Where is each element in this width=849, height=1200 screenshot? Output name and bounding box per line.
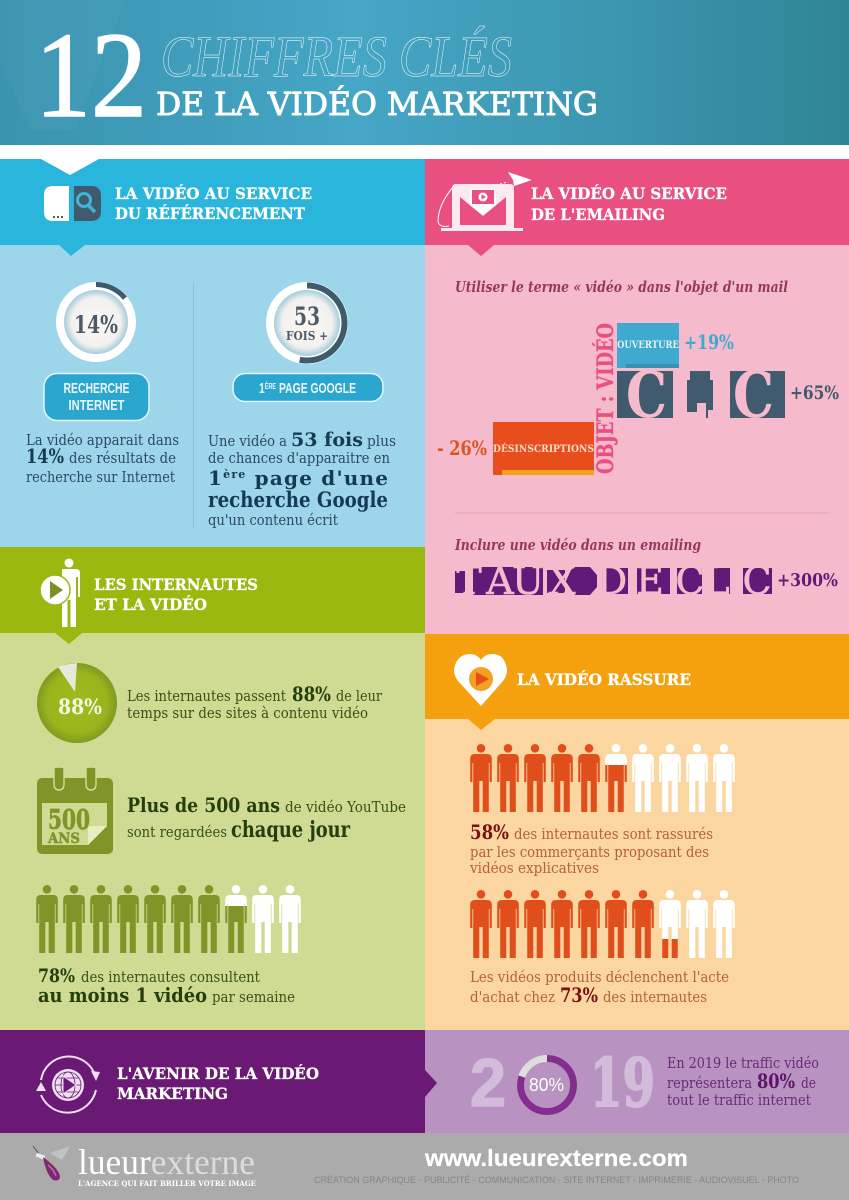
white separator band [0,145,849,159]
text: 53 fois: Une vidéo a [208,432,287,450]
logo: tagline: L'AGENCE QUI FAIT BRILLER VOTRE IMAGE [78,1179,256,1188]
text: 2019: 80% [757,1069,795,1093]
pictogram: 73% people [470,890,735,958]
text: 14% [26,431,179,486]
chart: 2019 with 80% ring [470,1044,655,1122]
stat: taux de clic: TAUXDECLIC [456,559,772,603]
heading: objet: Utiliser le terme « vidéo » dans l'objet d'un mail [455,279,788,296]
text: 500 ans: Plus de 500 ans [127,793,280,817]
chart: 53 fois ring: FOIS + [286,329,328,343]
section header: référencement: LA VIDÉO AU SERVICE [115,183,312,203]
pictogram: 58% people [470,744,735,812]
bar: désinscriptions: DÉSINSCRIPTIONS [493,443,594,455]
chart: 2019 with 80% ring: 2 [470,1045,506,1121]
text: 88% [127,682,383,722]
section header: internautes [0,547,425,644]
text: 73%: d'achat chez [470,988,555,1006]
section header: internautes: ET LA VIDÉO [94,594,207,614]
text: 78%: 78% [38,965,75,987]
panel: emailing [425,159,849,634]
text: 58%: vidéos explicatives [469,859,599,877]
logo: wordmark: lueurexterne [78,1142,255,1182]
badge: 1ère page google: 1 [259,380,267,397]
text: 73%: Les vidéos produits déclenchent l'acte [470,968,729,986]
section header: emailing: DE L'EMAILING [531,205,665,224]
text: 53 fois: plus [367,432,396,450]
text: 73%: 73% [560,983,598,1007]
icon: email laptop [438,172,532,231]
bar: clic: LI [692,378,708,402]
section header: référencement [0,159,425,256]
title: 12: 12 [35,8,147,143]
bar: ouverture: OUVERTURE [617,340,679,351]
header banner [0,0,849,145]
bar: ouverture [617,323,734,368]
text: 88%: Les internautes passent [127,687,286,705]
badge: 1ère page google: PAGE GOOGLE [276,380,356,397]
chart: 88% pie [37,663,117,743]
text: 53 fois: qu'un contenu écrit [208,511,338,529]
text: 53 fois: 1 [208,466,222,490]
badge: 1ère page google: ÈRE [265,382,277,391]
section header: référencement: DU RÉFÉRENCEMENT [115,203,305,223]
section header: rassure: LA VIDÉO RASSURE [517,669,691,689]
text: 2019: représentera [667,1074,752,1092]
icon: search [44,186,101,221]
text: 2019 [667,1054,819,1109]
chart: 2019 with 80% ring: 80% [529,1075,564,1095]
text: 53 fois: de chances d'apparaitre en [208,449,390,467]
badge: recherche internet: RECHERCHE [64,380,130,397]
text: 73%: des internautes [603,988,707,1006]
bar: ouverture: +19% [684,330,734,354]
footer [0,1133,849,1200]
text: 500 ans: de vidéo YouTube [285,798,406,816]
text: 58%: 58% [470,820,509,844]
text: 14%: des résultats de [69,449,176,467]
panel: rassure [425,634,849,1030]
section header: avenir [0,1030,437,1133]
section header: emailing [425,159,849,256]
text: 14%: La vidéo apparait dans [26,431,179,449]
icon: heart with play [454,654,507,706]
stat: taux de clic: +300% [777,570,838,591]
axis label: objet vidéo: OBJET : VIDÉO [592,323,619,474]
text: 14%: recherche sur Internet [26,468,175,486]
section header: avenir: L'AVENIR DE LA VIDÉO [117,1063,319,1083]
bar: désinscriptions [437,422,594,475]
text: 88%: 88% [292,682,331,706]
text: 500 ans: sont regardées [127,823,227,841]
text: 78%: au moins 1 vidéo [38,983,207,1007]
heading: inclure une vidéo: Inclure une vidéo dans un emailing [454,537,701,554]
text: 53 fois: 53 fois [291,429,363,451]
text: 58%: des internautes sont rassurés [514,825,713,843]
pictogram: 78% people [36,885,301,953]
icon: calendar 500 ans: ANS [47,831,80,847]
text: 88%: de leur [336,687,383,705]
chart: 53 fois ring [266,282,348,364]
services list: CRÉATION GRAPHIQUE - PUBLICITÉ - COMMUNICATION - SITE INTERNET - IMPRIMERIE - AUDIOVISUEL - PHOTO [314,1175,799,1186]
section header: rassure [425,634,849,730]
website url: www.lueurexterne.com [424,1145,688,1171]
text: 53 fois [208,429,396,529]
bar: clic: C [626,358,667,433]
chart: 88% pie: 88% [58,694,102,719]
section header: avenir: MARKETING [117,1084,228,1103]
title: chiffres clés: CHIFFRES CLÉS [161,24,512,89]
text: 500 ans: chaque jour [231,817,350,843]
bar: désinscriptions: - 26% [437,436,487,460]
text: 14%: 14% [26,444,64,468]
panel: référencement [0,159,425,547]
text: 78% [38,965,295,1007]
text: 2019: En 2019 le traffic vidéo [667,1054,819,1072]
text: 53 fois: page d'une [246,466,388,490]
text: 2019: de [801,1074,816,1092]
section header: internautes: LES INTERNAUTES [94,575,258,594]
chart: 2019 with 80% ring: 19 [590,1044,655,1122]
text: 88%: temps sur des sites à contenu vidéo [127,704,368,722]
icon: calendar 500 ans [37,767,113,854]
chart: 14% ring: 14% [74,310,118,339]
bar: clic [617,358,839,433]
panel: avenir [0,1030,849,1133]
text: 58% [469,820,713,877]
text: 53 fois: recherche Google [208,487,388,512]
title: de la vidéo marketing: DE LA VIDÉO MARKETING [156,85,598,123]
chart: 53 fois ring: 53 [294,302,320,331]
icon: rotating globe play [36,1056,100,1113]
text: 58%: par les commerçants proposant des [470,843,709,861]
text: 53 fois: ère [223,468,245,481]
badge: recherche internet [44,374,149,420]
badge: 1ère page google [233,374,383,402]
text: 78%: par semaine [212,988,295,1006]
text: 73% [470,968,729,1007]
bar: clic: C [733,358,774,433]
text: 500 ans [127,793,406,843]
section header: emailing: LA VIDÉO AU SERVICE [531,183,727,203]
text: 2019: tout le traffic internet [667,1091,811,1109]
bar: clic: +65% [790,382,839,404]
chart: 14% ring [56,282,136,362]
text: 78%: des internautes consultent [81,968,260,986]
logo: firefly [33,1146,70,1180]
icon: person with play [40,558,80,627]
panel: internautes [0,547,425,1030]
badge: recherche internet: INTERNET [68,397,124,414]
icon: calendar 500 ans: 500 [48,805,90,836]
